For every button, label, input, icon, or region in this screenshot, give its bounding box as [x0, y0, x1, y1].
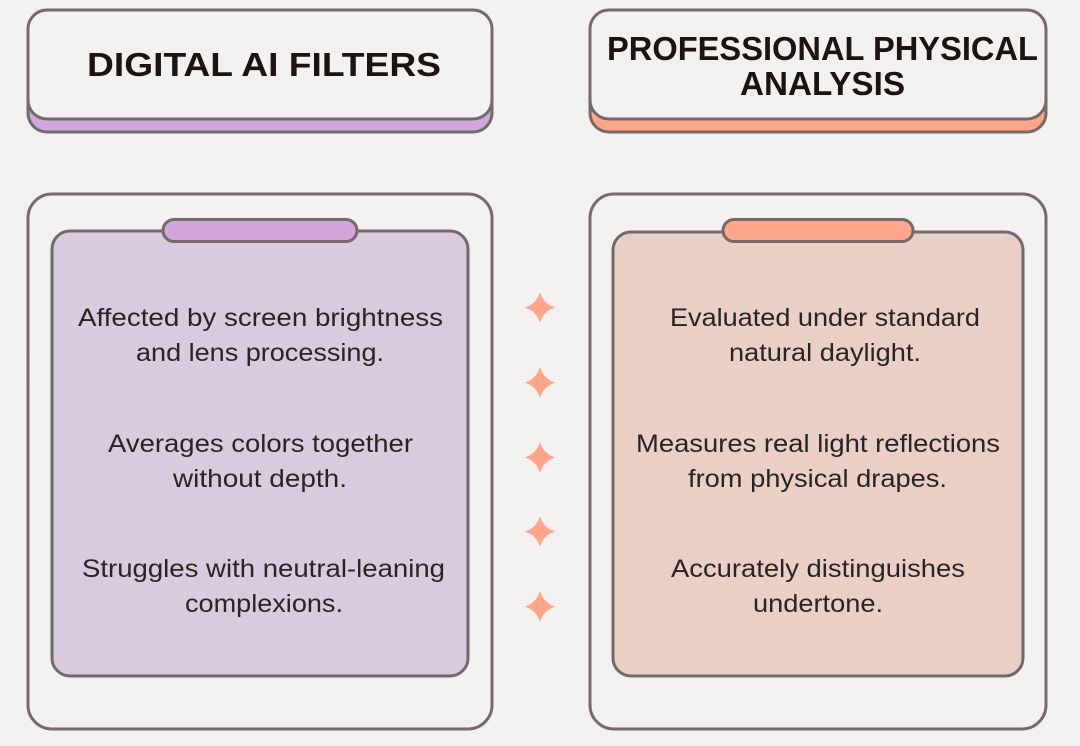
header: professional physical analysis [590, 10, 1046, 132]
heading: digital AI filters: DIGITAL AI FILTERS [87, 46, 441, 83]
text: natural daylight: natural daylight. [729, 339, 921, 367]
tab: professional [723, 220, 913, 242]
header: digital AI filters [28, 10, 492, 132]
text: natural daylight [670, 304, 980, 367]
text: light reflections [636, 430, 1000, 493]
heading: professional physical analysis [607, 30, 1038, 102]
text: screen brightness [78, 304, 443, 367]
panel: professional physical analysis [590, 194, 1046, 729]
text: screen brightness: and lens processing. [136, 339, 384, 367]
text: neutral complexions [82, 555, 445, 618]
tab: digital [163, 220, 357, 242]
text: averages colors: Averages colors together [108, 430, 413, 458]
text: undertone: Accurately distinguishes [671, 555, 965, 583]
text: averages colors [108, 430, 413, 493]
heading: professional physical analysis: PROFESSIONAL PHYSICAL [607, 30, 1038, 67]
text: neutral complexions: Struggles with neutral-leaning [82, 555, 445, 583]
text: undertone: undertone. [753, 590, 883, 618]
text: light reflections: from physical drapes. [688, 465, 947, 493]
icons: column of sparkles [526, 294, 554, 620]
text: light reflections: Measures real light reflections [636, 430, 1000, 458]
text: neutral complexions: complexions. [185, 590, 343, 618]
text: screen brightness: Affected by screen brightness [78, 304, 443, 332]
inner card: digital [52, 231, 468, 676]
heading: professional physical analysis: ANALYSIS [740, 65, 905, 102]
panel: digital AI filters [28, 194, 492, 729]
inner card: professional [613, 232, 1023, 676]
text: averages colors: without depth. [172, 465, 347, 493]
text: natural daylight: Evaluated under standard [670, 304, 980, 332]
text: undertone [671, 555, 965, 618]
